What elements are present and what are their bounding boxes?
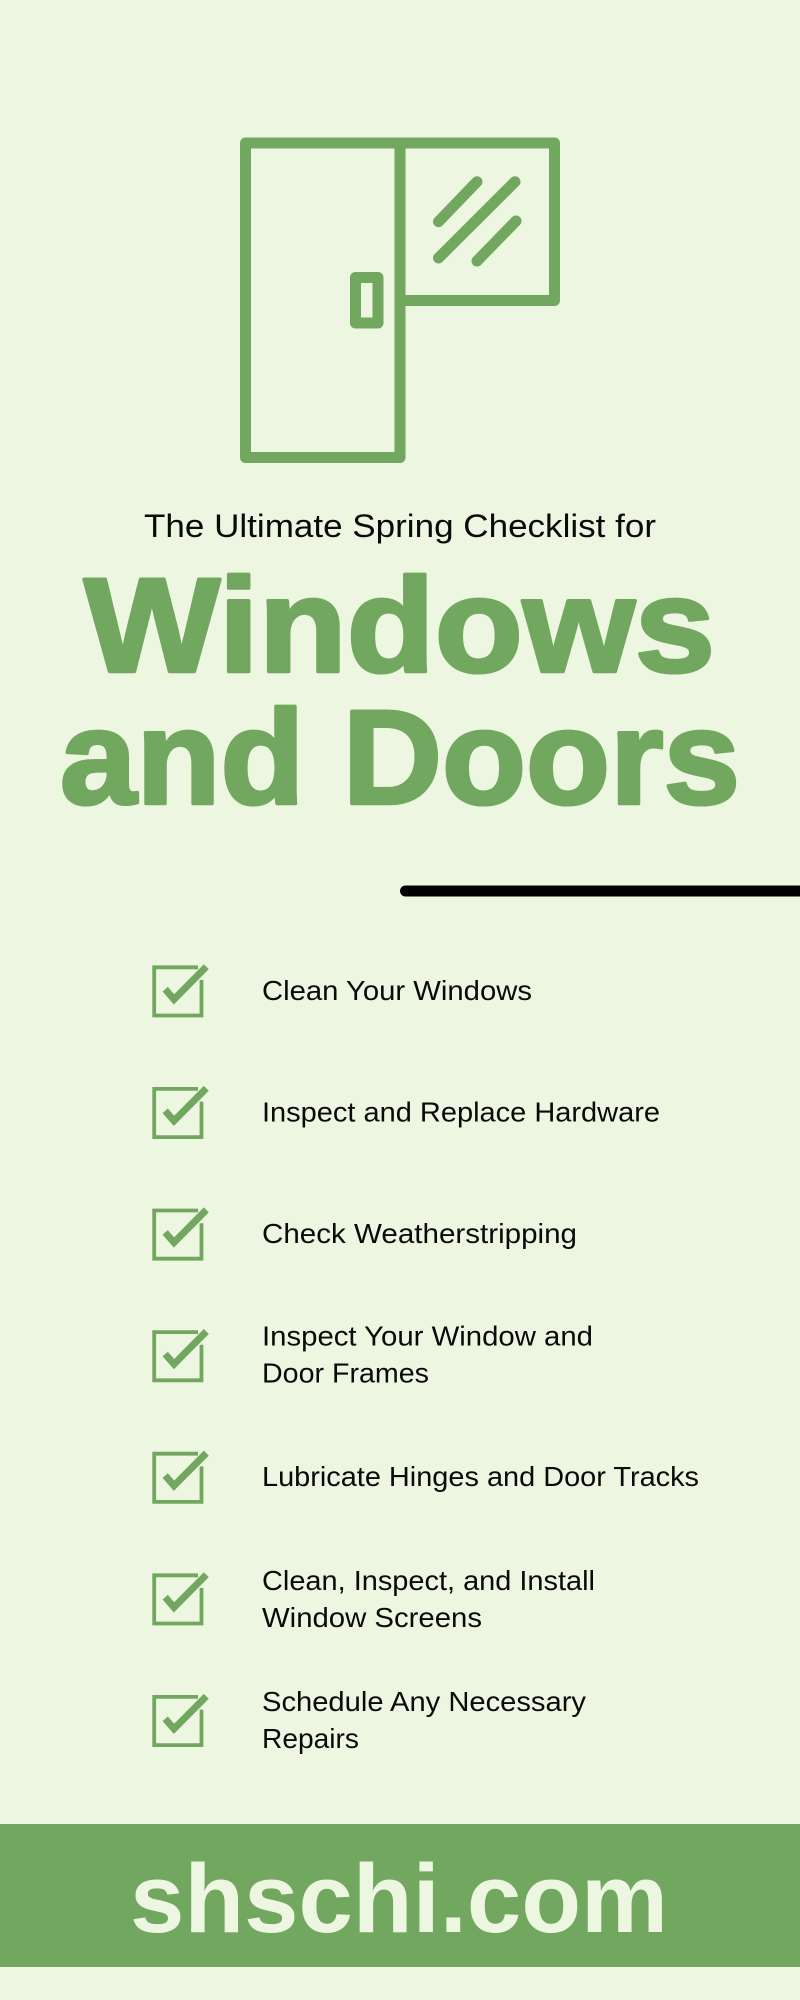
icon: door and window — [246, 143, 554, 458]
footer band — [0, 1824, 800, 1967]
title: and Doors — [60, 684, 740, 832]
item 4: Inspect Your Window and Door Frames: Inspect Your Window and — [262, 1321, 593, 1352]
footer website text: shschi.com — [130, 1844, 668, 1953]
item 4: Inspect Your Window and Door Frames — [154, 1321, 593, 1389]
item 5: Lubricate Hinges and Door Tracks: Lubricate Hinges and Door Tracks — [262, 1461, 699, 1492]
item 7: Schedule Any Necessary Repairs: Schedule Any Necessary — [262, 1686, 586, 1717]
item 1: Clean Your Windows — [154, 967, 532, 1016]
item 2: Inspect and Replace Hardware — [154, 1088, 660, 1137]
item 2: Inspect and Replace Hardware: Inspect and Replace Hardware — [262, 1097, 660, 1128]
item 4: Inspect Your Window and Door Frames: Door Frames — [262, 1358, 429, 1389]
item 6: Clean, Inspect, and Install Window Screens — [154, 1565, 595, 1633]
subtitle: The Ultimate Spring Checklist for — [144, 508, 656, 544]
item 7: Schedule Any Necessary Repairs — [154, 1686, 586, 1754]
item 6: Clean, Inspect, and Install Window Screens: Clean, Inspect, and Install — [262, 1565, 595, 1596]
title: Windows — [84, 552, 715, 700]
item 7: Schedule Any Necessary Repairs: Repairs — [262, 1723, 359, 1754]
checklist — [154, 967, 699, 1754]
title — [60, 552, 740, 832]
item 3: Check Weatherstripping: Check Weatherstripping — [262, 1218, 577, 1249]
item 5: Lubricate Hinges and Door Tracks — [154, 1453, 699, 1502]
item 1: Clean Your Windows: Clean Your Windows — [262, 975, 532, 1006]
item 3: Check Weatherstripping — [154, 1210, 577, 1259]
divider bar — [406, 886, 800, 896]
item 6: Clean, Inspect, and Install Window Screens: Window Screens — [262, 1602, 482, 1633]
